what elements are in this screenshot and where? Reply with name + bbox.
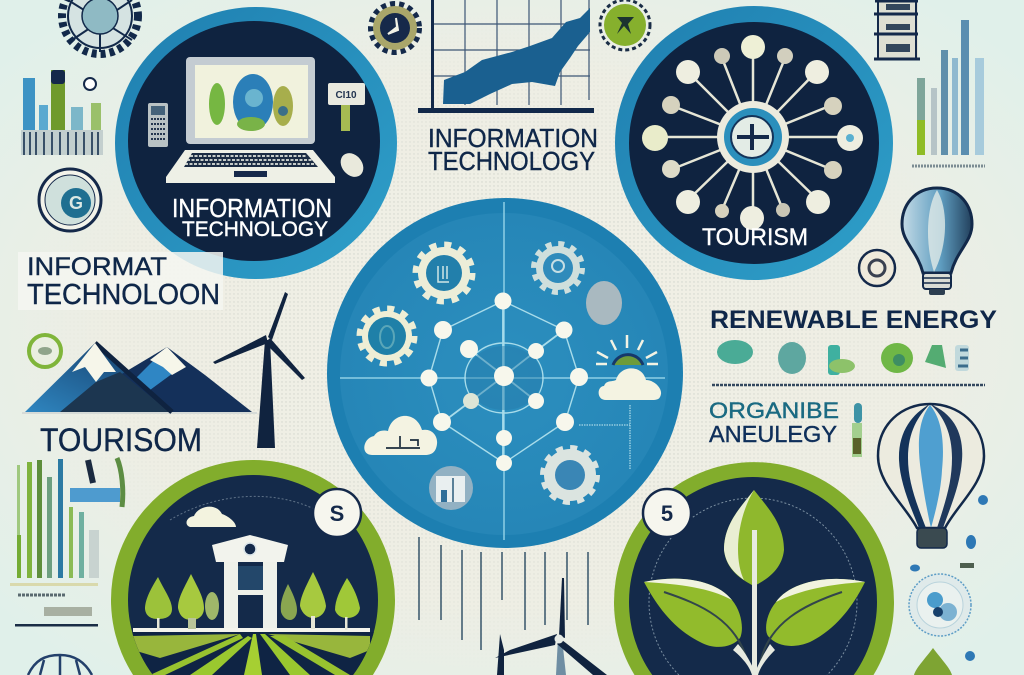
heading: organibe anculegy bbox=[709, 398, 839, 447]
panel: information technology circle bbox=[115, 7, 397, 279]
icon: calculator bbox=[148, 103, 168, 147]
icon: sign bbox=[328, 83, 365, 131]
icon: gear top right bbox=[534, 244, 582, 292]
leaf: top bbox=[724, 490, 784, 586]
bar chart: top right bbox=[912, 20, 985, 166]
caption: dashed small print bbox=[712, 384, 985, 386]
panel: organic leaf circle bottom right bbox=[614, 462, 894, 675]
heading: organibe anculegy: ORGANIBE bbox=[709, 398, 839, 423]
icon: wind turbine left bbox=[213, 292, 305, 448]
icon: gear lower right bbox=[543, 448, 597, 502]
panel: tourism circle bbox=[615, 6, 893, 280]
cloud bbox=[187, 507, 236, 527]
heading: renewable energy: RENEWABLE ENERGY bbox=[710, 306, 997, 334]
icon: green badge top bbox=[600, 0, 650, 50]
icon: green ring eye bbox=[29, 335, 61, 367]
icon: laptop bbox=[166, 57, 335, 183]
decorative grid lines below network bbox=[419, 537, 588, 650]
icon: stacked tower top right bbox=[874, 0, 920, 60]
icon: hexagon seal bbox=[909, 574, 971, 636]
icon: building bbox=[212, 535, 288, 628]
field bbox=[125, 632, 380, 675]
heading: informat technoloon: INFORMAT bbox=[27, 253, 167, 281]
icon: hot air balloon bbox=[878, 404, 984, 548]
leaf: left bbox=[644, 578, 747, 656]
line chart: top centre map graph bbox=[418, 0, 594, 113]
icon: gear left bbox=[360, 309, 414, 363]
icon: photo circle bbox=[429, 466, 473, 510]
network graph bbox=[420, 292, 588, 471]
icon: clock gear top bbox=[371, 4, 419, 52]
bar chart: lower left bbox=[10, 458, 123, 626]
trees bbox=[145, 572, 360, 630]
icon: light bulb bbox=[902, 188, 972, 295]
badge: S bbox=[313, 489, 361, 537]
icon: small leaf bottom right bbox=[914, 648, 952, 675]
icon row: energy symbols bbox=[717, 340, 969, 375]
panel: central network circle bbox=[327, 198, 683, 548]
heading: informat technoloon bbox=[18, 252, 223, 311]
hub with plus bbox=[717, 101, 789, 173]
stem bbox=[733, 530, 775, 675]
bar chart: top left bbox=[21, 70, 103, 155]
icon: spoked wheel top left bbox=[62, 0, 138, 54]
icon: G emblem: G bbox=[69, 193, 83, 213]
heading: tourisom: TOURISOM bbox=[40, 422, 202, 458]
heading: information technology inside circle bbox=[172, 193, 332, 241]
icon: G emblem bbox=[39, 169, 101, 231]
icon: globe grey bbox=[586, 281, 622, 325]
icon: mountains bbox=[22, 343, 257, 414]
heading: information technology centre: INFORMATION bbox=[428, 123, 598, 153]
badge: 5: 5 bbox=[661, 501, 673, 526]
icon: bottom left gauge bbox=[28, 655, 92, 675]
leaf: right bbox=[760, 579, 865, 664]
icon: sun and cloud bbox=[596, 335, 661, 400]
heading: organibe anculegy: ANEULEGY bbox=[709, 421, 837, 447]
heading: informat technoloon: TECHNOLOON bbox=[27, 279, 220, 311]
icon: sign: CI10 bbox=[335, 90, 357, 101]
icon: small blue dots right bbox=[910, 495, 988, 661]
badge: S: S bbox=[330, 501, 344, 526]
heading: tourism inside circle: TOURISM bbox=[702, 224, 808, 251]
heading: information technology centre: TECHNOLOGY bbox=[428, 146, 595, 176]
node ring bbox=[642, 35, 863, 230]
icon: small vial bbox=[852, 403, 862, 457]
heading: information technology inside circle: INFORMATION bbox=[172, 193, 332, 223]
icon: gear top left bbox=[416, 245, 472, 301]
heading: information technology inside circle: TECHNOLOGY bbox=[182, 218, 328, 241]
badge: 5 bbox=[643, 489, 691, 537]
icon: mouse bbox=[336, 149, 368, 181]
icon: cloud left bbox=[364, 416, 437, 455]
panel: organic culture circle bottom left bbox=[111, 460, 395, 675]
icon: wind turbine bottom bbox=[495, 578, 607, 675]
icon: ring bbox=[859, 250, 895, 286]
heading: information technology centre bbox=[428, 123, 598, 176]
